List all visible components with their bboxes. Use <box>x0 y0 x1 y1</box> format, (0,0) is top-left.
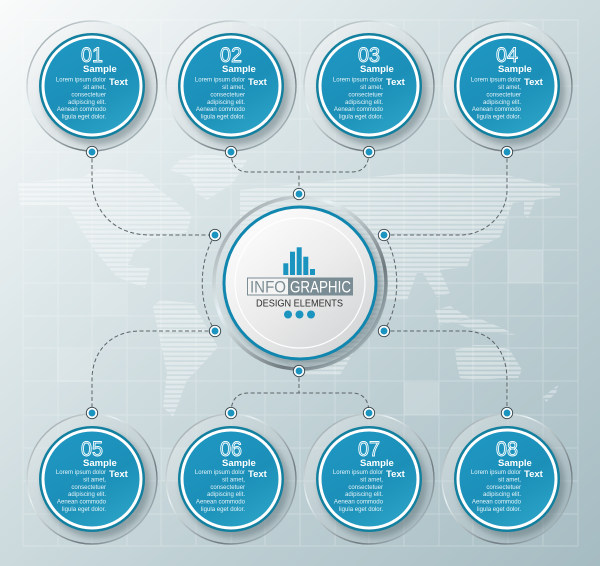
number: 08 <box>496 438 518 461</box>
body text: consectetuer <box>210 485 245 491</box>
body text: consectetuer <box>348 485 383 491</box>
body text: adipiscing elit. <box>345 100 383 106</box>
body text: Aenean commodo <box>196 500 246 506</box>
body text: adipiscing elit. <box>68 100 106 106</box>
heading: Sample <box>222 458 256 469</box>
body text: Aenean commodo <box>472 500 522 506</box>
body text: adipiscing elit. <box>207 492 245 498</box>
body text: Aenean commodo <box>334 500 384 506</box>
heading word: Text <box>248 469 268 480</box>
number: 05 <box>81 438 103 461</box>
panel: central hub <box>214 197 386 369</box>
number: 06 <box>220 438 242 461</box>
heading: Sample <box>222 64 256 75</box>
title banner: INFO <box>250 278 286 296</box>
body text: consectetuer <box>348 92 383 98</box>
body text: ligula eget dolor. <box>62 114 106 120</box>
body text: adipiscing elit. <box>483 492 521 498</box>
panel: 04 <box>442 21 572 151</box>
body text: adipiscing elit. <box>207 100 245 106</box>
heading word: Text <box>109 77 129 88</box>
panel: 05 <box>27 414 157 544</box>
body text: Aenean commodo <box>472 107 522 113</box>
icon: bar chart <box>283 247 315 275</box>
heading word: Text <box>524 77 544 88</box>
body text: ligula eget dolor. <box>339 507 383 513</box>
panel: 08 <box>442 414 572 544</box>
heading: Sample <box>498 458 532 469</box>
heading: Sample <box>360 64 394 75</box>
number: 04 <box>496 44 518 67</box>
body text: consectetuer <box>71 92 106 98</box>
subtitle: DESIGN ELEMENTS <box>256 298 343 310</box>
number: 02 <box>220 44 242 67</box>
body text: consectetuer <box>486 92 521 98</box>
body text: ligula eget dolor. <box>62 507 106 513</box>
body text: Aenean commodo <box>57 500 107 506</box>
body text: Lorem ipsum dolor <box>333 470 383 476</box>
heading word: Text <box>386 77 406 88</box>
body text: adipiscing elit. <box>345 492 383 498</box>
heading: Sample <box>498 64 532 75</box>
connector lines <box>92 152 507 413</box>
panel: 02 <box>166 21 296 151</box>
body text: Aenean commodo <box>334 107 384 113</box>
body text: sit amet, <box>360 477 383 483</box>
heading: Sample <box>360 458 394 469</box>
number: 03 <box>358 44 380 67</box>
body text: Lorem ipsum dolor <box>56 470 106 476</box>
body text: ligula eget dolor. <box>201 114 245 120</box>
body text: Lorem ipsum dolor <box>333 78 383 84</box>
heading: Sample <box>83 458 117 469</box>
body text: consectetuer <box>210 92 245 98</box>
title banner: GRAPHIC <box>290 278 351 296</box>
body text: consectetuer <box>486 485 521 491</box>
heading word: Text <box>248 77 268 88</box>
panel: 01 <box>27 21 157 151</box>
body text: sit amet, <box>498 85 521 91</box>
body text: sit amet, <box>222 477 245 483</box>
world map <box>18 155 560 416</box>
body text: Lorem ipsum dolor <box>471 470 521 476</box>
body text: adipiscing elit. <box>483 100 521 106</box>
body text: consectetuer <box>71 485 106 491</box>
heading word: Text <box>524 469 544 480</box>
body text: sit amet, <box>83 85 106 91</box>
heading word: Text <box>109 469 129 480</box>
body text: Lorem ipsum dolor <box>195 78 245 84</box>
panel: 07 <box>304 414 434 544</box>
title banner <box>247 278 353 296</box>
panel: 06 <box>166 414 296 544</box>
body text: sit amet, <box>222 85 245 91</box>
body text: sit amet, <box>360 85 383 91</box>
body text: ligula eget dolor. <box>201 507 245 513</box>
body text: ligula eget dolor. <box>477 114 521 120</box>
body text: Aenean commodo <box>57 107 107 113</box>
body text: adipiscing elit. <box>68 492 106 498</box>
body text: ligula eget dolor. <box>339 114 383 120</box>
three dots <box>284 310 315 318</box>
number: 01 <box>81 44 103 67</box>
body text: Aenean commodo <box>196 107 246 113</box>
body text: Lorem ipsum dolor <box>195 470 245 476</box>
body text: Lorem ipsum dolor <box>471 78 521 84</box>
body text: sit amet, <box>498 477 521 483</box>
heading: Sample <box>83 64 117 75</box>
connector nodes <box>88 148 511 417</box>
panel: 03 <box>304 21 434 151</box>
number: 07 <box>358 438 380 461</box>
body text: Lorem ipsum dolor <box>56 78 106 84</box>
body text: sit amet, <box>83 477 106 483</box>
heading word: Text <box>386 469 406 480</box>
body text: ligula eget dolor. <box>477 507 521 513</box>
